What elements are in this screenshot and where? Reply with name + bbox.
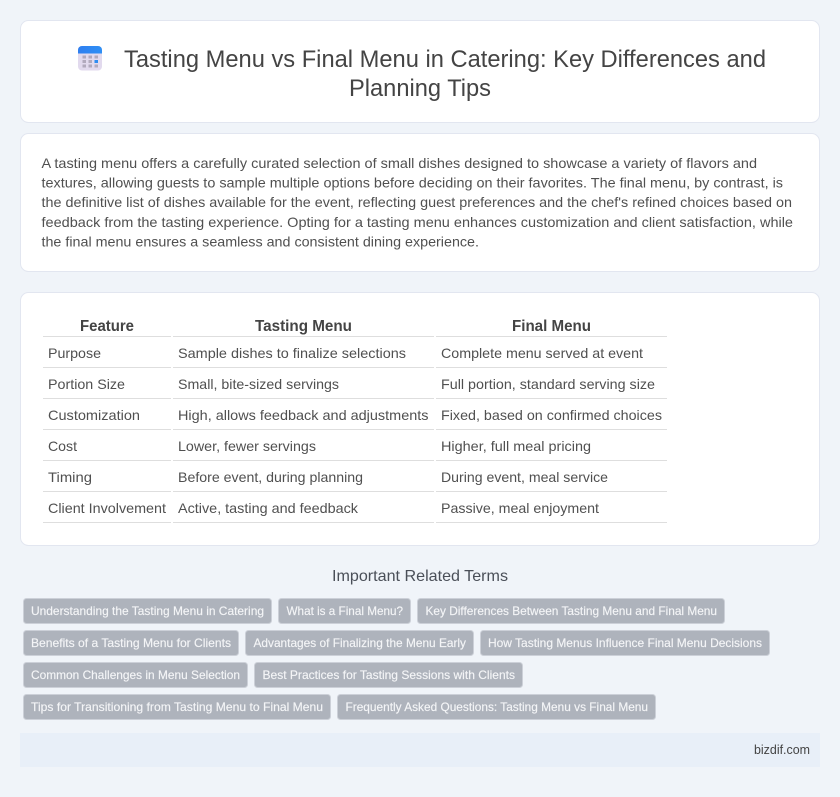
footer: bizdif.com <box>754 742 810 757</box>
table row: cost: Higher, full meal pricing <box>441 438 591 454</box>
panel: intro paragraph <box>20 134 820 272</box>
text block: description: feedback from the tasting experience. Opting for a tasting menu enhances customization and client satisfaction, while <box>42 214 793 230</box>
tag: Tips for Transitioning from Tasting Menu to Final Menu <box>31 700 323 714</box>
table row: purpose: Complete menu served at event <box>441 345 643 361</box>
tag <box>418 598 724 624</box>
table row: customization <box>43 407 667 430</box>
tag <box>24 694 330 720</box>
table row: timing: Timing <box>48 469 92 485</box>
tag: Common Challenges in Menu Selection <box>31 668 240 682</box>
table row: cost: Cost <box>48 438 77 454</box>
text block: description: the definitive list of dishes available for the event, reflecting guest preferences and the chef's refined choices based on <box>42 194 792 210</box>
table row: cost: Lower, fewer servings <box>178 438 316 454</box>
table row: purpose: Sample dishes to finalize selections <box>178 345 406 361</box>
table row: client involvement: Active, tasting and feedback <box>178 500 359 516</box>
table header row: Tasting Menu <box>255 318 352 335</box>
table row: portion size: Full portion, standard serving size <box>441 376 655 392</box>
tag: Best Practices for Tasting Sessions with Clients <box>262 668 515 682</box>
tag: Benefits of a Tasting Menu for Clients <box>31 636 231 650</box>
table row: timing <box>43 469 667 492</box>
table header row: Final Menu <box>512 318 591 335</box>
table row: customization: Fixed, based on confirmed choices <box>441 407 662 423</box>
text block: description <box>42 155 793 249</box>
title: Planning Tips <box>349 75 491 102</box>
icon: calendar <box>78 46 102 70</box>
tag <box>24 598 272 624</box>
table row: purpose <box>43 345 667 368</box>
table header row <box>43 318 667 336</box>
panel: comparison table <box>20 292 820 546</box>
tag: Understanding the Tasting Menu in Catering <box>31 604 264 618</box>
table row: client involvement: Client Involvement <box>48 500 166 516</box>
table row: portion size: Small, bite-sized servings <box>178 376 339 392</box>
tag <box>254 662 522 688</box>
table row: purpose: Purpose <box>48 345 101 361</box>
table row: client involvement: Passive, meal enjoyment <box>441 500 599 516</box>
table row: customization: Customization <box>48 407 140 423</box>
title <box>124 46 766 102</box>
table row: portion size <box>43 376 667 398</box>
table row: timing: During event, meal service <box>441 469 608 485</box>
tag: How Tasting Menus Influence Final Menu Decisions <box>488 636 762 650</box>
table row: cost <box>43 438 667 460</box>
table row: portion size: Portion Size <box>48 376 125 392</box>
tag group: related terms <box>24 598 770 720</box>
tag <box>278 598 410 624</box>
text block: description: the final menu ensures a seamless and consistent dining experience. <box>42 233 479 249</box>
tag <box>24 630 238 656</box>
tag: Advantages of Finalizing the Menu Early <box>254 636 466 650</box>
panel: header <box>20 20 820 122</box>
tag <box>338 694 656 720</box>
footer <box>20 733 820 767</box>
heading: important related terms: Important Related Terms <box>332 568 508 585</box>
tag <box>480 630 770 656</box>
tag <box>246 630 474 656</box>
text block: description: A tasting menu offers a carefully curated selection of small dishes designed to showcase a variety of flavors and <box>42 155 757 171</box>
tag: Key Differences Between Tasting Menu and Final Menu <box>426 604 717 618</box>
text block: description: textures, allowing guests to sample multiple options before deciding on their favorites. The final menu, by contrast, is <box>42 175 783 191</box>
table row: customization: High, allows feedback and adjustments <box>178 407 428 423</box>
tag <box>24 662 248 688</box>
tag: What is a Final Menu? <box>286 604 403 618</box>
table row: timing: Before event, during planning <box>178 469 363 485</box>
table row: client involvement <box>43 500 667 522</box>
table header row: Feature <box>80 318 134 335</box>
title: Tasting Menu vs Final Menu in Catering: Key Differences and <box>124 46 766 73</box>
tag: Frequently Asked Questions: Tasting Menu vs Final Menu <box>346 700 648 714</box>
